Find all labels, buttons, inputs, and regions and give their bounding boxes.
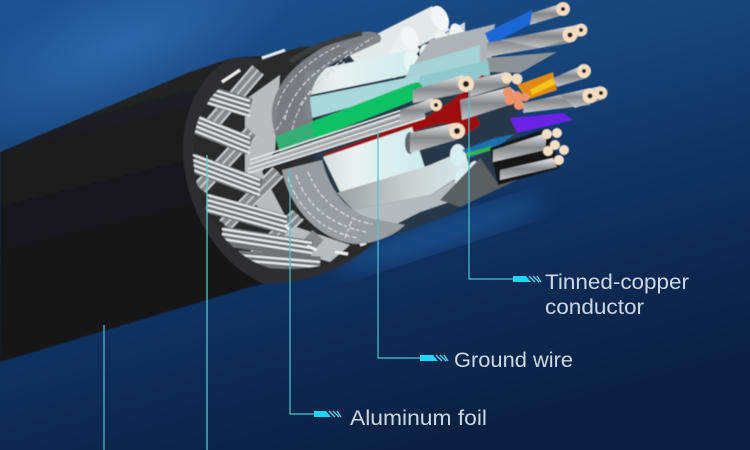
jacket end rim: [183, 58, 372, 283]
wire: purple: [510, 113, 573, 133]
braid frayed edges: [222, 50, 366, 254]
wire: gray jacket bottom right: [440, 158, 517, 207]
callout: Ground wire: Ground wire: [454, 348, 573, 372]
wire: red: [323, 75, 490, 158]
callout: Aluminum foil: [290, 170, 487, 430]
wire: white lower: [323, 127, 425, 192]
wire: pale translucent: [305, 74, 425, 120]
wire: center long strands: [523, 88, 590, 113]
wire: orange: [517, 72, 557, 100]
cable illustration: [0, 2, 608, 362]
braid bands: [193, 95, 320, 266]
wire: teal gap: [415, 60, 490, 95]
white filler wires: [305, 3, 467, 96]
cross bands: [200, 70, 318, 268]
cream bundle: [542, 128, 569, 165]
callout: Ground wire: [378, 130, 573, 372]
wire bundle backing: [300, 30, 520, 240]
wire: ground strands: [250, 106, 430, 170]
strand groups: [413, 75, 463, 103]
leader line: cable jacket: [103, 325, 105, 450]
callout: Tinned-copper conductor: [469, 90, 689, 319]
conductor tips: [430, 2, 608, 139]
braided shield: [192, 46, 375, 270]
wire: upper strands: [487, 27, 570, 57]
copper bundle: [503, 87, 530, 110]
leader line: braid: [206, 155, 208, 450]
wire: green: [311, 83, 422, 139]
foil mesh lower: [282, 160, 405, 244]
cable black jacket: [0, 56, 372, 362]
wire: blue-green small: [462, 134, 515, 158]
wire: blue: [485, 10, 535, 45]
silver inner wrap: [245, 75, 350, 262]
foil mesh upper: [272, 31, 381, 150]
gray sheath: [400, 24, 495, 85]
callout: Tinned-copper conductor: conductor: [545, 295, 644, 319]
callout: Aluminum foil: Aluminum foil: [350, 406, 487, 430]
callout: Tinned-copper conductor: Tinned-copper: [545, 270, 689, 294]
